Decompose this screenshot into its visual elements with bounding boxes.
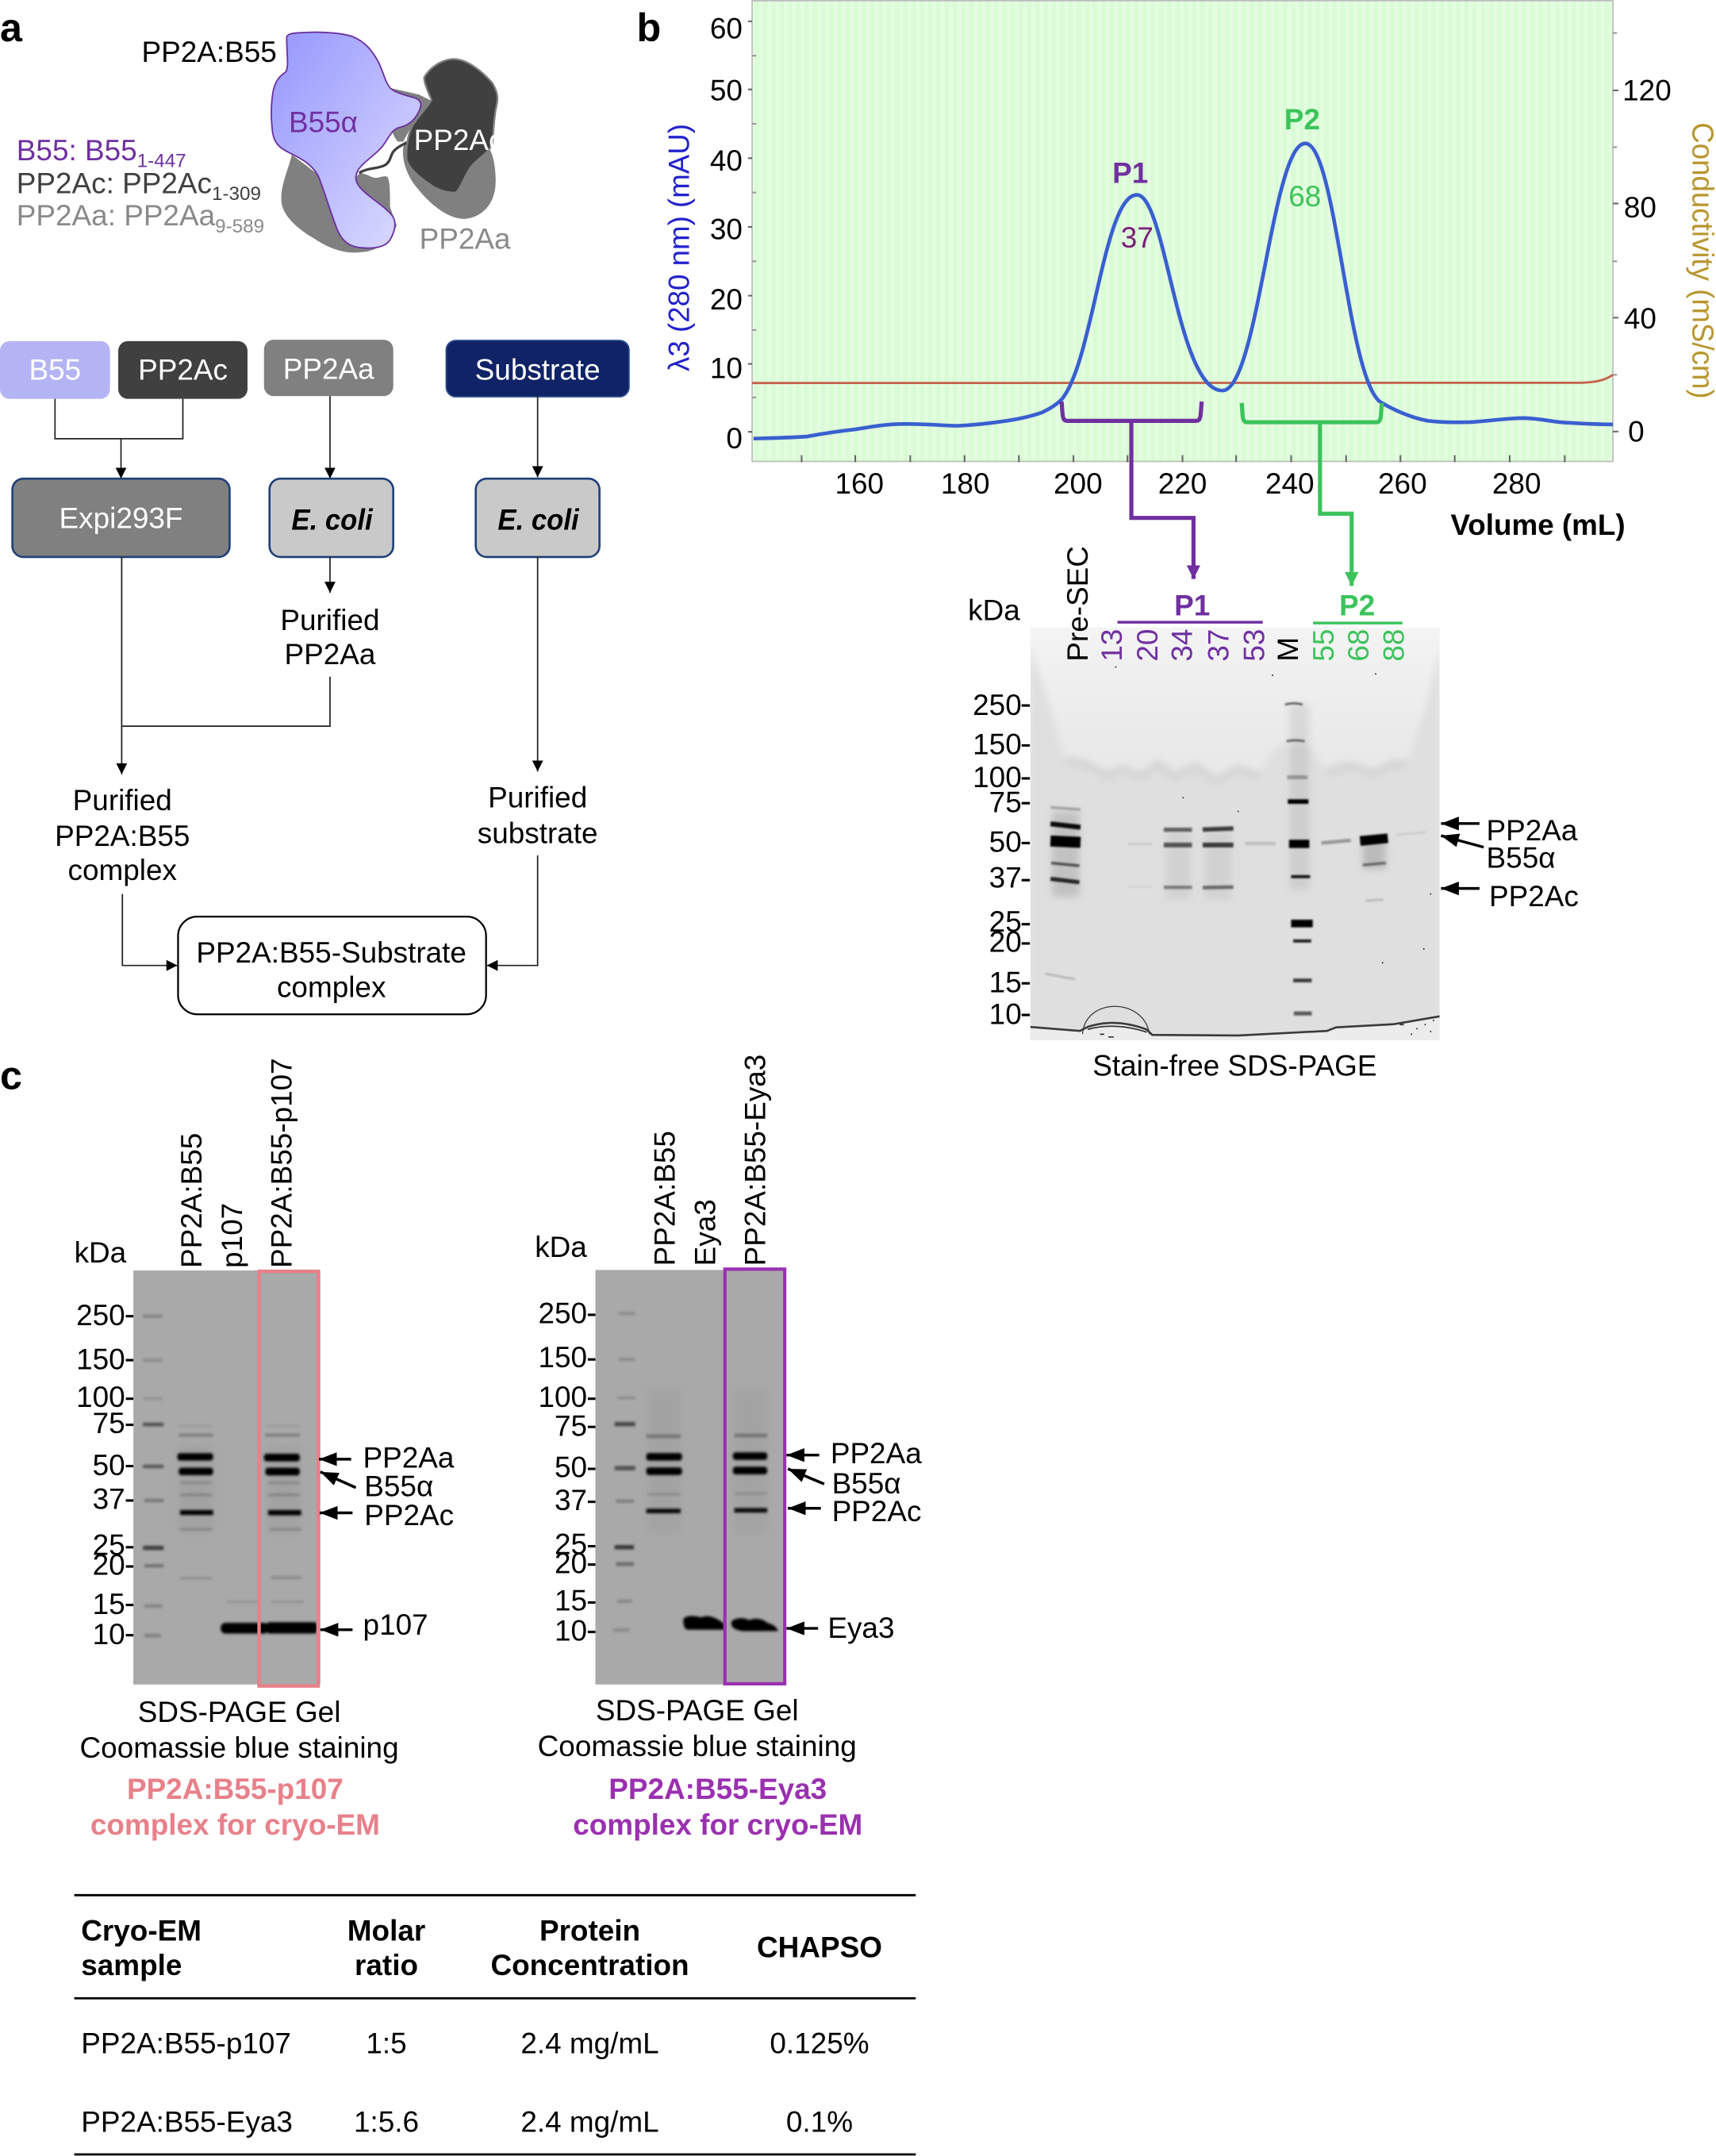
gel marker sizes: Eya3: 25 (555, 1528, 587, 1560)
header: P1 lanes: P1 (1174, 590, 1210, 622)
gel marker sizes: p107 (76, 1299, 133, 1651)
dye front (1064, 760, 1407, 781)
highlight box: Eya3 complex lane (725, 1269, 785, 1684)
right axis labels (1622, 75, 1672, 448)
gel marker sizes: Eya3 (538, 1297, 595, 1647)
band annotations (1441, 814, 1579, 913)
gel marker sizes: p107: 25 (93, 1528, 125, 1561)
gel region below dye front (1031, 660, 1439, 943)
table row: Eya3 (81, 2105, 853, 2138)
highlight caption: Eya3 complex (573, 1773, 862, 1841)
lane labels: 88 (1378, 629, 1411, 662)
x axis labels: 240 (1265, 467, 1315, 500)
table row: p107: PP2A:B55-p107 (81, 2027, 291, 2060)
text: Purified PP2A:B55 complex: PP2A:B55 (55, 820, 190, 852)
highlight caption: p107 complex: PP2A:B55-p107 (127, 1773, 344, 1805)
label: kDa: kDa (968, 594, 1020, 627)
left axis labels: 60 (710, 13, 743, 45)
lane labels: 68 (1342, 629, 1375, 662)
lane labels: Eya3 gel: PP2A:B55 (648, 1131, 681, 1266)
band annotations: p107 gel: p107 (363, 1608, 428, 1641)
y axis title: absorbance: λ3 (280 nm) (mAU) (662, 124, 695, 371)
left axis labels: 50 (710, 75, 743, 107)
band annotations: p107 gel: PP2Ac (364, 1499, 454, 1531)
gel marker sizes: 75 (989, 786, 1022, 818)
box: E. coli for substrate: E. coli (497, 503, 579, 536)
caption: p107 gel: SDS-PAGE Gel (138, 1696, 340, 1728)
text: Purified PP2Aa (280, 604, 380, 671)
gel marker sizes: Eya3: 20 (555, 1547, 587, 1580)
text: Purified PP2A:B55 complex: complex (68, 854, 178, 886)
table header: ratio (355, 1949, 418, 1981)
x axis labels (835, 467, 1541, 500)
gel marker sizes: p107: 150 (76, 1343, 125, 1375)
box: Expi293F: Expi293F (60, 502, 182, 535)
arrow: B55 and PP2Ac to Expi293F (55, 399, 183, 478)
smears (179, 1444, 301, 1533)
gel marker sizes: 250 (973, 689, 1022, 721)
bracket and arrow: P2 fractions to gel (1242, 403, 1382, 586)
lane labels: p107 gel: PP2A:B55 (175, 1133, 208, 1268)
x axis labels: 160 (835, 467, 884, 500)
box: E. coli for PP2Aa: E. coli (291, 503, 373, 536)
arrow: Expi293F and PP2Aa to purified complex (121, 557, 330, 774)
gel bottom edge (1030, 1006, 1440, 1041)
icon: PP2A:B55 holoenzyme cartoon: B55α (289, 106, 358, 138)
gel marker sizes: 10 (989, 997, 1022, 1030)
x axis labels: 220 (1158, 467, 1207, 500)
x axis labels: 180 (941, 467, 989, 500)
legend: construct boundaries: PP2Ac: PP2Ac (17, 167, 212, 200)
box: PP2A:B55-Substrate complex: PP2A:B55-Substrate (196, 936, 466, 969)
lane labels (1061, 546, 1411, 662)
caption: p107 gel: Coomassie blue staining (80, 1731, 399, 1764)
lane labels: 55 (1307, 629, 1340, 662)
left axis labels: 10 (710, 352, 743, 385)
gel marker sizes: Eya3: 50 (555, 1451, 587, 1483)
lane labels: Eya3 gel: PP2A:B55-Eya3 (739, 1055, 772, 1266)
label: kDa: kDa (535, 1231, 587, 1263)
table row: Eya3: 1:5.6 (354, 2105, 419, 2138)
band annotations: PP2Ac (1489, 880, 1579, 913)
lane labels: Pre-SEC (1061, 546, 1094, 662)
gel marker sizes: p107: 37 (93, 1482, 125, 1515)
panel c: complex gels and cryo-EM table (0, 1054, 922, 2154)
panel a: complex schematic and workflow (0, 6, 629, 1014)
x axis labels: 280 (1492, 467, 1541, 500)
peak label P1: P1 (1112, 157, 1148, 190)
arrow: E. coli to purified PP2Aa (329, 557, 331, 593)
fraction label 68: 68 (1288, 180, 1321, 213)
box: PP2Ac: PP2Ac (138, 353, 228, 386)
legend: construct boundaries: 9-589 (215, 216, 264, 237)
text: Purified PP2A:B55 complex: Purified (73, 784, 172, 817)
text: Purified PP2A:B55 complex (55, 784, 190, 886)
gel marker sizes: 37 (989, 862, 1022, 894)
arrow: E. coli to purified substrate (537, 557, 539, 771)
gel marker sizes: p107: 20 (93, 1548, 125, 1581)
box: Substrate: Substrate (475, 353, 601, 386)
table header: Protein (539, 1914, 640, 1947)
box: PP2Aa: PP2Aa (283, 352, 374, 385)
gel marker sizes: p107: 75 (93, 1407, 125, 1439)
smears (647, 1389, 767, 1533)
table row: p107: 2.4 mg/mL (520, 2027, 659, 2060)
box: Expi293F (13, 478, 229, 557)
table header: Cryo-EM (81, 1914, 202, 1947)
lane labels: p107 gel: p107 (216, 1203, 248, 1268)
panel letter b: b (636, 6, 661, 50)
arrow: PP2Aa to E. coli (329, 396, 331, 478)
right axis labels: 120 (1622, 75, 1672, 107)
highlight box: p107 complex lane (259, 1271, 318, 1686)
gel marker sizes: Eya3: 37 (555, 1484, 587, 1516)
box: B55 (0, 341, 110, 399)
fraction label 37: 37 (1121, 221, 1154, 254)
gel marker sizes: p107: 50 (93, 1449, 125, 1482)
gel marker sizes: Eya3: 75 (555, 1409, 587, 1442)
band annotations: p107 gel: B55α (364, 1470, 433, 1503)
arrow: complex to final assembly (122, 894, 178, 966)
gel marker sizes: Eya3: 100 (538, 1381, 587, 1413)
table row: p107: 0.125% (770, 2027, 870, 2060)
left axis labels: 20 (710, 283, 743, 316)
gel specks (1100, 667, 1434, 1037)
band annotations: Eya3 gel: PP2Aa (831, 1437, 922, 1470)
text: Purified PP2Aa: PP2Aa (285, 638, 376, 671)
gel: PP2A:B55-Eya3 (595, 1269, 785, 1685)
box: E. coli for substrate (476, 478, 600, 557)
lane labels: 13 (1096, 629, 1128, 662)
right axis labels: 40 (1624, 302, 1656, 335)
legend: construct boundaries: B55: B55 (17, 134, 137, 167)
caption: p107 gel (80, 1696, 399, 1764)
table: cryo-EM samples (75, 1895, 916, 2154)
panel letter a: a (0, 6, 23, 50)
lane labels: p107 gel: PP2A:B55-p107 (265, 1058, 298, 1268)
box: Substrate (446, 340, 629, 397)
icon: PP2A:B55 holoenzyme cartoon: PP2Ac (414, 124, 504, 156)
highlight caption: Eya3 complex: complex for cryo-EM (573, 1808, 862, 1841)
box: B55: B55 (29, 353, 81, 386)
chart: SEC chromatogram (662, 1, 1716, 541)
right axis labels: 0 (1628, 415, 1645, 448)
text: Purified substrate: substrate (478, 817, 598, 849)
band annotations: p107 gel: PP2Aa (363, 1441, 455, 1474)
legend: construct boundaries: 1-447 (137, 151, 186, 172)
table header: Molar (347, 1914, 425, 1947)
table row: Eya3: 2.4 mg/mL (520, 2105, 659, 2138)
table header: sample (81, 1949, 182, 1981)
lane labels: 20 (1131, 629, 1164, 662)
lane labels: 53 (1238, 629, 1270, 662)
peak label P2: P2 (1284, 103, 1320, 136)
bands (143, 1315, 317, 1637)
right axis labels: 80 (1624, 191, 1656, 224)
arrow: substrate to final assembly (487, 855, 538, 966)
legend: construct boundaries: 1-309 (212, 183, 261, 205)
band annotations: Eya3 gel (786, 1437, 922, 1644)
band annotations: p107 gel (319, 1441, 455, 1641)
gel caption: Stain-free SDS-PAGE (1092, 1049, 1377, 1082)
panel letter c: c (0, 1054, 22, 1098)
icon: PP2A:B55 holoenzyme cartoon (271, 33, 511, 256)
text: Purified substrate (478, 781, 598, 849)
box: PP2A:B55-Substrate complex: complex (277, 971, 386, 1004)
bracket and arrow: P1 fractions to gel (1061, 402, 1202, 579)
gel marker sizes: Eya3: 250 (538, 1297, 587, 1329)
gel marker sizes: Eya3: 15 (555, 1585, 587, 1617)
gel marker sizes (973, 689, 1030, 1030)
conductivity trace (752, 375, 1613, 383)
highlight caption: p107 complex (90, 1773, 380, 1841)
caption: Eya3 gel (538, 1694, 857, 1762)
gel: stain-free SDS-PAGE (1030, 628, 1440, 1045)
band annotations: PP2Aa (1487, 814, 1578, 847)
label: PP2A:B55: PP2A:B55 (142, 36, 277, 68)
box: PP2A:B55-Substrate complex (178, 917, 486, 1014)
highlight caption: p107 complex: complex for cryo-EM (90, 1808, 380, 1841)
legend: construct boundaries: PP2Aa: PP2Aa (17, 199, 215, 232)
lane labels: 34 (1166, 629, 1199, 662)
lane labels: M (1272, 637, 1304, 662)
absorbance trace (754, 144, 1613, 439)
gel marker sizes: 100 (973, 761, 1022, 794)
highlight caption: Eya3 complex: PP2A:B55-Eya3 (608, 1773, 827, 1805)
gel marker sizes: 150 (973, 728, 1022, 761)
x axis labels: 260 (1378, 467, 1427, 500)
table row: Eya3: 0.1% (786, 2105, 853, 2138)
gel marker sizes: 15 (989, 966, 1022, 998)
text: Purified substrate: Purified (488, 781, 587, 813)
icon: PP2A:B55 holoenzyme cartoon: PP2Aa (420, 223, 511, 256)
left axis labels: 40 (710, 144, 743, 177)
x axis labels: 200 (1054, 467, 1103, 500)
text: Purified PP2Aa: Purified (280, 604, 380, 636)
gel marker sizes: 25 (989, 905, 1022, 938)
arrow: Substrate to E. coli (537, 396, 539, 477)
bands (613, 1312, 778, 1631)
lane labels: Eya3 gel: Eya3 (689, 1199, 721, 1266)
left axis labels: 0 (726, 422, 743, 455)
band annotations: Eya3 gel: Eya3 (827, 1612, 894, 1644)
header: P2 lanes (1313, 590, 1403, 623)
lane labels: 37 (1202, 629, 1234, 662)
box: PP2Ac (118, 341, 248, 399)
gel marker sizes: 50 (989, 826, 1022, 859)
panel b: size exclusion chromatogram and gel (636, 1, 1716, 1082)
lane labels: p107 gel (175, 1058, 298, 1268)
gel: PP2A:B55-p107 (133, 1270, 321, 1686)
header: P2 lanes: P2 (1339, 590, 1375, 622)
table row: p107 (81, 2027, 870, 2060)
gel smear regions (1052, 704, 1386, 899)
gel marker sizes: Eya3: 10 (555, 1615, 587, 1647)
caption: Eya3 gel: Coomassie blue staining (538, 1730, 857, 1762)
box: PP2Aa (264, 340, 393, 396)
lane labels: Eya3 gel (648, 1055, 772, 1266)
gel marker sizes: 20 (989, 925, 1022, 958)
box: E. coli for PP2Aa (270, 478, 393, 557)
left axis labels (710, 13, 743, 455)
band annotations: B55α (1487, 842, 1556, 874)
caption: Eya3 gel: SDS-PAGE Gel (596, 1694, 799, 1727)
left axis labels: 30 (710, 213, 743, 246)
gel marker sizes: p107: 250 (76, 1299, 125, 1332)
table row: Eya3: PP2A:B55-Eya3 (81, 2105, 293, 2138)
gel marker sizes: p107: 10 (93, 1618, 125, 1651)
gel bands (1045, 703, 1426, 1013)
band annotations: Eya3 gel: PP2Ac (832, 1495, 921, 1528)
gel marker sizes: p107: 15 (93, 1588, 125, 1620)
label: kDa: kDa (75, 1236, 127, 1269)
band annotations: Eya3 gel: B55α (832, 1467, 901, 1500)
table header (81, 1914, 882, 1981)
gel marker sizes: Eya3: 150 (538, 1341, 587, 1374)
x axis title: Volume (mL) (1450, 509, 1626, 541)
table row: p107: 1:5 (366, 2027, 407, 2060)
table header: CHAPSO (757, 1931, 882, 1963)
legend: construct boundaries (17, 134, 264, 237)
table header: Concentration (490, 1949, 689, 1981)
gel marker sizes: p107: 100 (76, 1381, 125, 1413)
